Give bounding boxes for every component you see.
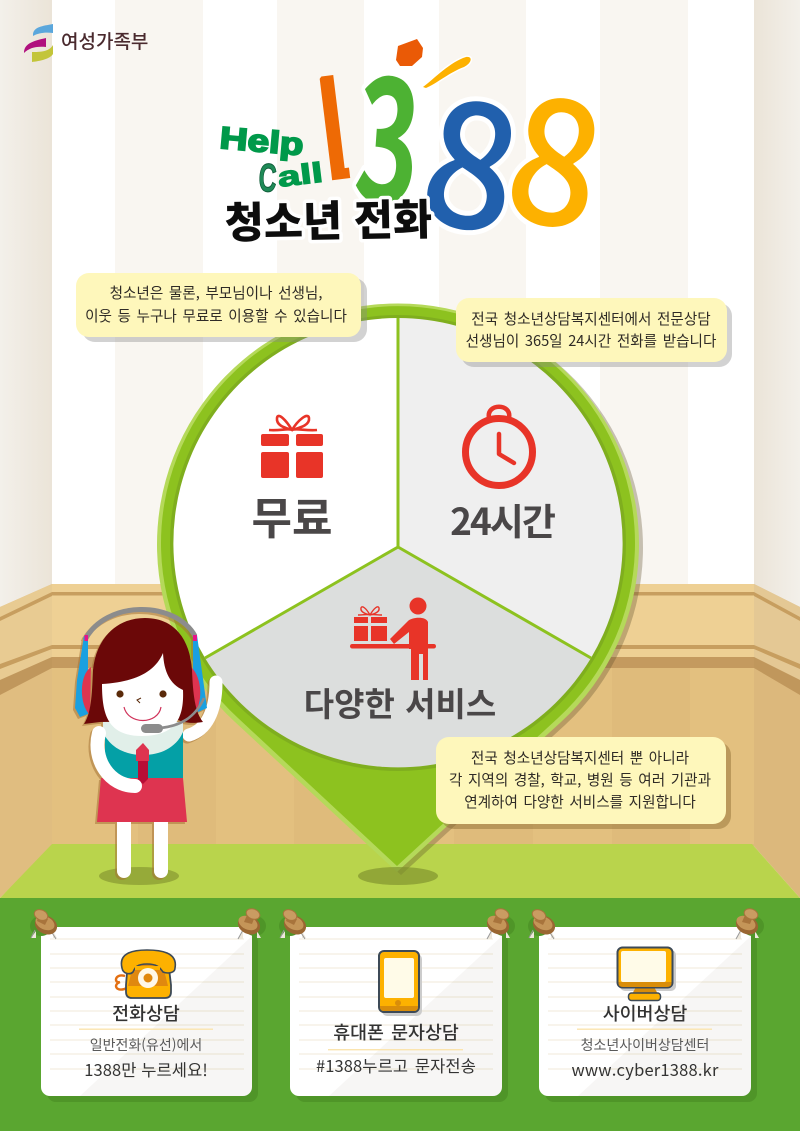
- pie segment: free: [173, 318, 398, 658]
- label: various services: 다양한 서비스: [304, 678, 496, 726]
- icon: person with gift: [350, 598, 436, 680]
- heading: 사이버상담: [603, 1000, 687, 1026]
- pins: [30, 907, 266, 939]
- location pin pie chart: [157, 303, 643, 875]
- card: phone counseling: 1388만 누르세요!: [84, 1057, 208, 1081]
- logo numerals 1388: 1: [288, 9, 371, 240]
- icon: rotary phone: [116, 950, 175, 998]
- girl figure: [75, 609, 216, 878]
- ground shadow: [99, 867, 179, 885]
- callout: anyone can use for free: 청소년은 물론, 부모님이나 선생님,: [110, 282, 322, 303]
- logo: ministry of gender equality and family: 여성가족부: [61, 27, 148, 54]
- heading: 휴대폰 문자상담: [333, 1019, 459, 1045]
- text: 청소년사이버상담센터: [581, 1035, 709, 1055]
- label: free: 무료: [252, 483, 332, 547]
- Help Call lettering: all: [276, 157, 325, 193]
- card: cyber counseling: www.cyber1388.kr: [571, 1057, 719, 1081]
- callout: 24 hours 365 days: [456, 298, 732, 367]
- callout: anyone can use for free: 이웃 등 누구나 무료로 이용할 수 있습니다: [85, 305, 347, 326]
- background: striped wall: [0, 0, 800, 610]
- pie segment: various services: [205, 547, 591, 767]
- logo numerals 1388: 8: [491, 23, 623, 281]
- text: #1388누르고 문자전송: [316, 1053, 476, 1077]
- pin drop shadow: [161, 306, 643, 875]
- label: 24 hours: 24시간: [450, 492, 555, 546]
- icon: tablet: [379, 951, 422, 1016]
- callout: various services: 각 지역의 경찰, 학교, 병원 등 여러 기관과: [449, 769, 711, 790]
- icon: clock: [466, 407, 532, 486]
- heading: 전화상담: [112, 1000, 180, 1026]
- shadow under pin tip: [358, 867, 438, 885]
- title logo: Help Call 1388 youth phone: [220, 39, 594, 244]
- text: 일반전화(유선)에서: [90, 1035, 202, 1055]
- callout: various services: [436, 737, 731, 829]
- pie segment: 24 hours: [398, 318, 623, 658]
- youth phone calligraphy: 청소년 전화: [224, 186, 433, 251]
- logo numerals 1388: 8: [406, 25, 540, 283]
- card: mobile text counseling: [279, 907, 515, 1102]
- pins: [279, 907, 515, 939]
- callout: various services: 연계하여 다양한 서비스를 지원합니다: [464, 791, 696, 812]
- card: cyber counseling: [528, 907, 764, 1102]
- callout: 24 hours 365 days: 선생님이 365일 24시간 전화를 받습니다: [466, 330, 717, 351]
- pins: [528, 907, 764, 939]
- icon: gift: [261, 416, 323, 478]
- character: girl with headset: [75, 609, 216, 885]
- logo: ministry of gender equality and family: [24, 24, 148, 62]
- icon: monitor: [618, 948, 676, 1000]
- callout: anyone can use for free: [76, 273, 367, 342]
- background: wainscot and floor: [0, 584, 800, 1131]
- callout: various services: 전국 청소년상담복지센터 뿐 아니라: [471, 747, 690, 768]
- card: phone counseling: [30, 907, 266, 1102]
- Help Call lettering: C: [257, 156, 278, 202]
- Help Call lettering: Help: [218, 121, 305, 162]
- logo numerals 1388: 3: [349, 5, 429, 253]
- callout: 24 hours 365 days: 전국 청소년상담복지센터에서 전문상담: [471, 308, 711, 329]
- Help Call lettering: [218, 121, 325, 202]
- logo numerals 1388: [320, 39, 594, 235]
- pin body: [157, 303, 639, 872]
